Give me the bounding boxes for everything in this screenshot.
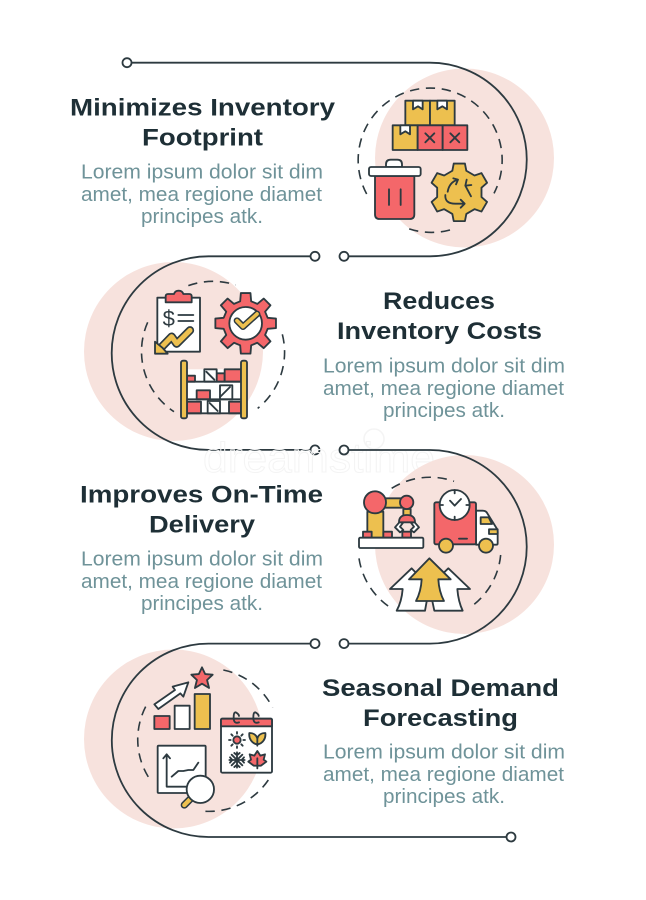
title: Delivery — [149, 511, 255, 538]
body text — [323, 356, 565, 422]
icon: upward arrows — [390, 558, 470, 611]
icon: seasonal calendar — [221, 712, 272, 773]
pink background circle — [84, 262, 263, 441]
body text: principes atk. — [383, 786, 505, 808]
body text: Lorem ipsum dolor sit dim — [81, 549, 323, 571]
body text — [323, 742, 565, 808]
icon: quality gear — [215, 293, 276, 354]
body text: amet, mea regione diamet — [323, 378, 564, 400]
title: Footprint — [142, 125, 263, 152]
icon: warehouse shelves — [181, 361, 247, 418]
panel: reduces inventory costs — [84, 252, 565, 454]
title: Minimizes Inventory — [70, 95, 335, 122]
connector line — [340, 446, 527, 648]
icon group: clipboard, gear, shelves — [142, 281, 285, 418]
pink background circle — [375, 455, 554, 634]
title: Improves On-Time — [80, 481, 323, 508]
title — [70, 95, 335, 152]
title: Inventory Costs — [337, 318, 542, 345]
title: Forecasting — [363, 705, 518, 732]
icon: delivery truck with clock — [434, 490, 498, 553]
body text: Lorem ipsum dolor sit dim — [81, 162, 323, 184]
icon: trash can — [369, 160, 421, 219]
icon: stacked boxes — [393, 101, 467, 150]
body text: Lorem ipsum dolor sit dim — [323, 356, 565, 378]
pink background circle — [375, 68, 554, 248]
body text — [81, 162, 323, 228]
icon: recycling gear — [432, 164, 487, 221]
panel: seasonal demand forecasting — [84, 639, 565, 842]
icon: chart with magnifier — [158, 746, 214, 805]
icon: cost clipboard — [155, 291, 200, 354]
icon: robotic arm — [359, 491, 423, 548]
icon: growth bars with star — [154, 667, 213, 729]
body text: amet, mea regione diamet — [81, 571, 322, 593]
title — [80, 481, 323, 538]
icon group: bars, chart, calendar — [138, 667, 273, 811]
title — [322, 675, 559, 732]
body text: principes atk. — [141, 593, 263, 615]
watermark: dreamstime — [203, 434, 435, 481]
connector line — [122, 58, 527, 261]
pink background circle — [84, 650, 263, 828]
title — [337, 288, 542, 345]
body text: Lorem ipsum dolor sit dim — [323, 742, 565, 764]
body text — [81, 549, 323, 615]
connector line — [112, 639, 515, 842]
body text: amet, mea regione diamet — [323, 764, 564, 786]
body text: principes atk. — [141, 206, 263, 228]
panel: improves on-time delivery — [80, 446, 554, 648]
connector line — [112, 252, 319, 454]
icon: cost clipboard: $ — [163, 306, 175, 331]
icon group: boxes, trash, gear — [358, 88, 502, 232]
panel: minimizes inventory footprint — [70, 58, 554, 261]
title: Reduces — [383, 288, 495, 315]
body text: principes atk. — [383, 400, 505, 422]
icon group: robot arm, truck, arrows — [359, 477, 501, 611]
title: Seasonal Demand — [322, 675, 559, 702]
body text: amet, mea regione diamet — [81, 184, 322, 206]
